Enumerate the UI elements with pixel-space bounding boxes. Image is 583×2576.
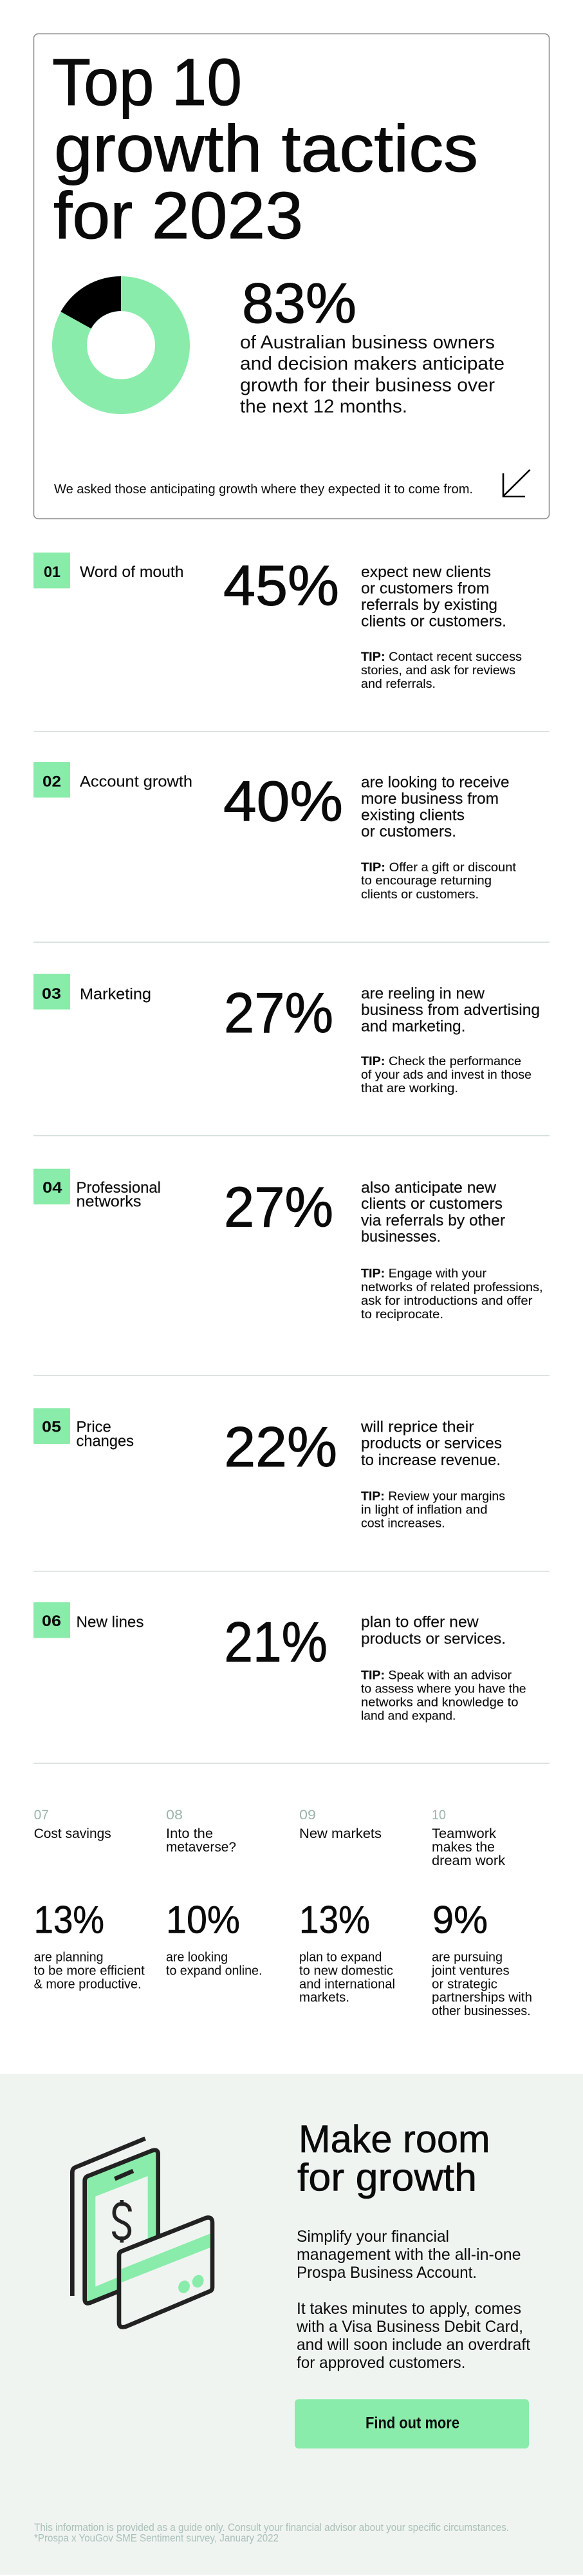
heading: professional networks: Professional bbox=[76, 1179, 161, 1197]
heading: into the metaverse: metaverse? bbox=[166, 1840, 236, 1855]
description: to be more efficient bbox=[34, 1964, 145, 1978]
statistic: 22%: 22% bbox=[224, 1415, 337, 1479]
description: plan to expand bbox=[299, 1950, 382, 1965]
description: more business from bbox=[361, 790, 499, 808]
description: via referrals by other bbox=[361, 1212, 505, 1229]
heading: price changes: Price bbox=[76, 1419, 111, 1436]
heading: marketing: Marketing bbox=[80, 986, 151, 1003]
heading: teamwork makes the dream work: makes the bbox=[432, 1840, 495, 1855]
tip bbox=[361, 1490, 505, 1531]
statistic: 13%: 13% bbox=[34, 1899, 104, 1942]
description: partnerships with bbox=[432, 1990, 532, 2005]
number 07: 07 bbox=[34, 1808, 49, 1823]
description: are pursuing bbox=[432, 1950, 503, 1965]
heading: teamwork makes the dream work: dream work bbox=[432, 1853, 506, 1868]
description: are looking to receive bbox=[361, 774, 510, 791]
statistic: 83%: 83% bbox=[242, 271, 356, 335]
number badge 04 bbox=[33, 1169, 70, 1204]
tip: to reciprocate. bbox=[361, 1307, 443, 1321]
panel: intro card bbox=[33, 33, 550, 519]
description: are reeling in new bbox=[361, 985, 485, 1003]
tip: cost increases. bbox=[361, 1517, 445, 1531]
tip bbox=[361, 860, 517, 902]
panel: make room for growth bbox=[0, 2074, 583, 2575]
panel: tactic 07 bbox=[34, 1808, 145, 1992]
description: to new domestic bbox=[299, 1964, 393, 1978]
description: business from advertising bbox=[361, 1001, 540, 1019]
description: referrals by existing bbox=[361, 596, 497, 614]
heading: price changes: changes bbox=[76, 1432, 134, 1450]
tip: networks and knowledge to bbox=[361, 1695, 519, 1709]
intro description: the next 12 months. bbox=[240, 397, 407, 417]
body text: Prospa Business Account. bbox=[297, 2264, 477, 2282]
description: or customers. bbox=[361, 823, 456, 840]
description: and international bbox=[299, 1977, 395, 1992]
statistic: 13%: 13% bbox=[299, 1899, 370, 1942]
tip bbox=[361, 1054, 532, 1095]
description: and marketing. bbox=[361, 1018, 466, 1036]
panel: tactic 10 bbox=[431, 1808, 532, 2018]
title: growth tactics bbox=[54, 111, 478, 185]
button: find out more: Find out more bbox=[366, 2414, 459, 2432]
heading: teamwork makes the dream work: Teamwork bbox=[432, 1826, 497, 1841]
tip: ask for introductions and offer bbox=[361, 1294, 533, 1308]
body text: and will soon include an overdraft bbox=[297, 2336, 530, 2354]
tip: stories, and ask for reviews bbox=[361, 663, 515, 677]
tip: that are working. bbox=[361, 1081, 458, 1095]
tip: land and expand. bbox=[361, 1709, 456, 1723]
panel: tactic 08 bbox=[166, 1808, 262, 1978]
description: existing clients bbox=[361, 807, 465, 824]
number badge 01: 01 bbox=[44, 564, 60, 581]
description: businesses. bbox=[361, 1228, 441, 1245]
body text: for approved customers. bbox=[297, 2354, 465, 2372]
title bbox=[52, 45, 478, 252]
panel: tactic 04 bbox=[33, 1169, 543, 1321]
description bbox=[166, 1950, 262, 1978]
statistic: 45%: 45% bbox=[223, 554, 339, 617]
tip: TIP: Offer a gift or discount bbox=[361, 860, 517, 875]
tip: TIP: Review your margins bbox=[361, 1490, 505, 1504]
description: other businesses. bbox=[432, 2003, 531, 2018]
number badge 06: 06 bbox=[42, 1613, 61, 1630]
heading: new markets: New markets bbox=[299, 1826, 382, 1841]
intro description: and decision makers anticipate bbox=[240, 354, 504, 374]
description: & more productive. bbox=[34, 1977, 142, 1992]
tip: to encourage returning bbox=[361, 874, 492, 888]
tip bbox=[361, 1267, 543, 1321]
heading: make room for growth bbox=[297, 2117, 490, 2199]
body text: It takes minutes to apply, comes bbox=[297, 2300, 521, 2318]
footnote: This information is provided as a guide only. Consult your financial advisor about your specific circumstances. bbox=[34, 2521, 509, 2533]
description: also anticipate new bbox=[361, 1179, 496, 1197]
description: products or services bbox=[361, 1435, 502, 1452]
number badge 03: 03 bbox=[42, 985, 61, 1003]
number badge 05 bbox=[33, 1408, 70, 1444]
description bbox=[361, 774, 510, 840]
heading: into the metaverse bbox=[166, 1826, 236, 1855]
number badge 01 bbox=[33, 553, 70, 589]
intro description: growth for their business over bbox=[240, 375, 495, 395]
title: for 2023 bbox=[53, 178, 303, 252]
heading: professional networks bbox=[76, 1179, 161, 1211]
panel: tactic 09 bbox=[299, 1808, 395, 2005]
body text bbox=[296, 2228, 530, 2372]
tip: TIP: Speak with an advisor bbox=[361, 1668, 512, 1682]
arrow bbox=[503, 470, 530, 497]
number 08: 08 bbox=[166, 1808, 183, 1823]
body text: with a Visa Business Debit Card, bbox=[296, 2318, 523, 2336]
survey note: We asked those anticipating growth where they expected it to come from. bbox=[54, 482, 473, 497]
panel: tactic 05 bbox=[33, 1408, 505, 1531]
panel: tactic 03 bbox=[33, 974, 540, 1095]
number badge 05: 05 bbox=[42, 1419, 61, 1436]
heading: into the metaverse: Into the bbox=[166, 1826, 213, 1841]
panel: tactic 02 bbox=[33, 762, 517, 902]
tip: and referrals. bbox=[361, 677, 436, 691]
body text: management with the all-in-one bbox=[297, 2246, 521, 2264]
number 09: 09 bbox=[299, 1808, 316, 1823]
description bbox=[361, 985, 540, 1036]
tip: to assess where you have the bbox=[361, 1681, 526, 1696]
number badge 06 bbox=[33, 1602, 70, 1638]
intro description: of Australian business owners bbox=[240, 332, 495, 353]
description: to expand online. bbox=[166, 1964, 262, 1978]
description bbox=[361, 564, 506, 630]
title: Top 10 bbox=[52, 45, 242, 119]
heading: make room for growth: Make room bbox=[299, 2117, 490, 2161]
panel: tactic 01 bbox=[33, 553, 522, 691]
description: to increase revenue. bbox=[361, 1452, 501, 1469]
description: products or services. bbox=[361, 1631, 506, 1648]
description: or strategic bbox=[432, 1977, 497, 1992]
number 10: 10 bbox=[432, 1808, 446, 1823]
heading: new lines: New lines bbox=[76, 1614, 144, 1631]
description: joint ventures bbox=[431, 1964, 510, 1978]
donut chart: 83% bbox=[60, 276, 172, 397]
statistic: 21%: 21% bbox=[224, 1610, 328, 1674]
heading: price changes bbox=[76, 1419, 134, 1450]
description: will reprice their bbox=[360, 1419, 474, 1436]
number badge 03 bbox=[33, 974, 70, 1010]
body text: Simplify your financial bbox=[297, 2228, 449, 2246]
description: plan to offer new bbox=[361, 1614, 479, 1631]
description bbox=[361, 1179, 505, 1245]
description bbox=[431, 1950, 532, 2018]
footnote: *Prospa x YouGov SME Sentiment survey, January 2022 bbox=[34, 2532, 279, 2544]
description bbox=[34, 1950, 145, 1992]
statistic: 9%: 9% bbox=[432, 1899, 488, 1942]
footnote bbox=[34, 2521, 509, 2544]
statistic: 27%: 27% bbox=[224, 981, 333, 1045]
number badge 04: 04 bbox=[42, 1179, 62, 1197]
heading: professional networks: networks bbox=[76, 1193, 142, 1211]
panel: tactic 06 bbox=[33, 1602, 526, 1723]
number badge 02 bbox=[33, 762, 70, 797]
description: expect new clients bbox=[361, 564, 491, 581]
number badge 02: 02 bbox=[42, 773, 61, 791]
description: clients or customers bbox=[361, 1195, 503, 1213]
tip: TIP: Check the performance bbox=[361, 1054, 521, 1068]
tip: of your ads and invest in those bbox=[361, 1068, 532, 1082]
statistic: 10%: 10% bbox=[166, 1899, 240, 1942]
description bbox=[361, 1614, 506, 1648]
intro description bbox=[240, 332, 504, 417]
tip bbox=[361, 650, 522, 691]
description: are looking bbox=[166, 1950, 228, 1965]
tip: networks of related professions, bbox=[361, 1280, 543, 1294]
tip: TIP: Contact recent success bbox=[361, 650, 522, 664]
tip: clients or customers. bbox=[361, 887, 479, 902]
icon: phone and card bbox=[72, 2139, 212, 2327]
heading: account growth: Account growth bbox=[80, 773, 192, 791]
tip: TIP: Engage with your bbox=[361, 1267, 486, 1281]
tip bbox=[361, 1668, 526, 1723]
description: clients or customers. bbox=[361, 613, 506, 630]
description: markets. bbox=[299, 1990, 349, 2005]
description bbox=[299, 1950, 395, 2005]
heading: teamwork makes the dream work bbox=[432, 1826, 506, 1868]
heading: make room for growth: for growth bbox=[297, 2155, 477, 2199]
button: find out more bbox=[295, 2399, 529, 2448]
description: are planning bbox=[34, 1950, 104, 1965]
statistic: 40%: 40% bbox=[223, 770, 343, 833]
heading: word of mouth: Word of mouth bbox=[80, 564, 184, 581]
statistic: 27%: 27% bbox=[224, 1175, 333, 1239]
tip: in light of inflation and bbox=[361, 1503, 488, 1517]
description bbox=[360, 1419, 502, 1469]
heading: cost savings: Cost savings bbox=[34, 1826, 111, 1841]
description: or customers from bbox=[361, 580, 489, 598]
